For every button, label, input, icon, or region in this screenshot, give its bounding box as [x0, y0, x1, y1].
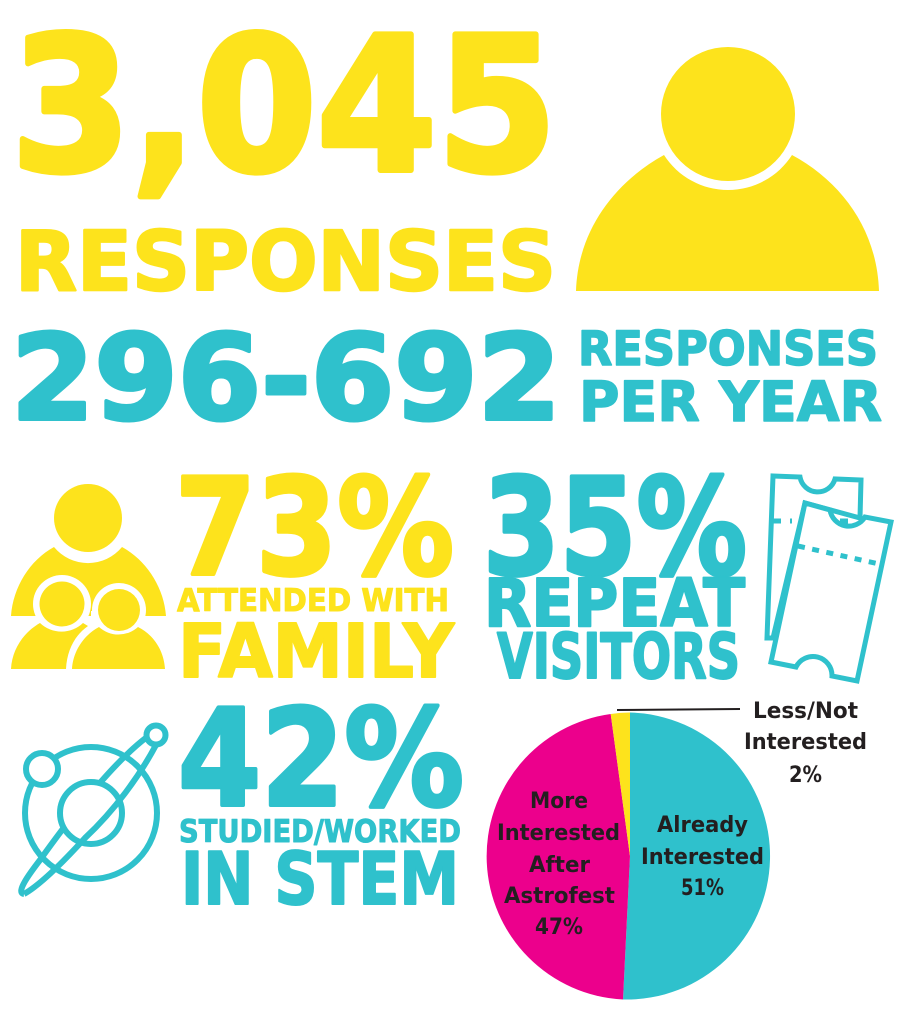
pie label: already interested: Interested	[641, 845, 764, 870]
percentage 73%: 73%	[175, 450, 454, 606]
stat: studied or worked in STEM	[178, 681, 464, 921]
pie label: more interested after Astrofest: 47%	[535, 915, 583, 940]
stat: responses per year	[11, 309, 882, 447]
icon: family	[11, 484, 166, 669]
pie chart: interest in STEM	[487, 699, 867, 1000]
pie label: less or not interested: Interested	[744, 730, 867, 755]
pie label: more interested after Astrofest	[497, 789, 620, 940]
pie label: more interested after Astrofest: More	[530, 789, 588, 814]
leader line	[617, 709, 740, 710]
label ATTENDED WITH: ATTENDED WITH	[177, 583, 449, 619]
pie label: already interested: Already	[657, 813, 748, 838]
pie label: less or not interested	[744, 699, 867, 788]
icon: planet with orbit	[21, 726, 166, 894]
label RESPONSES: RESPONSES	[15, 215, 556, 310]
label IN STEM: IN STEM	[181, 837, 459, 921]
icon: tickets	[767, 476, 891, 681]
range 296-692: 296-692	[11, 309, 561, 447]
pie label: more interested after Astrofest: Interested	[497, 821, 620, 846]
pie label: less or not interested: Less/Not	[753, 699, 858, 724]
label RESPONSES: RESPONSES	[578, 322, 878, 377]
pie label: more interested after Astrofest: Astrofest	[504, 884, 615, 909]
label VISITORS: VISITORS	[497, 620, 740, 693]
label STUDIED/WORKED: STUDIED/WORKED	[179, 814, 461, 850]
pie label: already interested	[641, 813, 764, 901]
percentage 42%: 42%	[178, 681, 464, 837]
label PER YEAR: PER YEAR	[579, 370, 882, 434]
percentage 35%: 35%	[483, 450, 747, 606]
pie label: less or not interested: 2%	[789, 763, 822, 788]
slice: less or not interested 2%	[611, 712, 630, 856]
slice: more interested 47%	[487, 714, 630, 1000]
icon: person	[576, 47, 879, 291]
pie label: already interested: 51%	[681, 876, 724, 901]
big number 3,045: 3,045	[11, 0, 557, 214]
stat: total responses	[11, 0, 557, 310]
stat: attended with family	[175, 450, 455, 695]
label REPEAT: REPEAT	[484, 565, 745, 642]
slice: already interested 51%	[623, 712, 770, 1000]
stat: repeat visitors	[483, 450, 747, 693]
pie label: more interested after Astrofest: After	[529, 853, 590, 878]
label FAMILY: FAMILY	[178, 609, 455, 695]
